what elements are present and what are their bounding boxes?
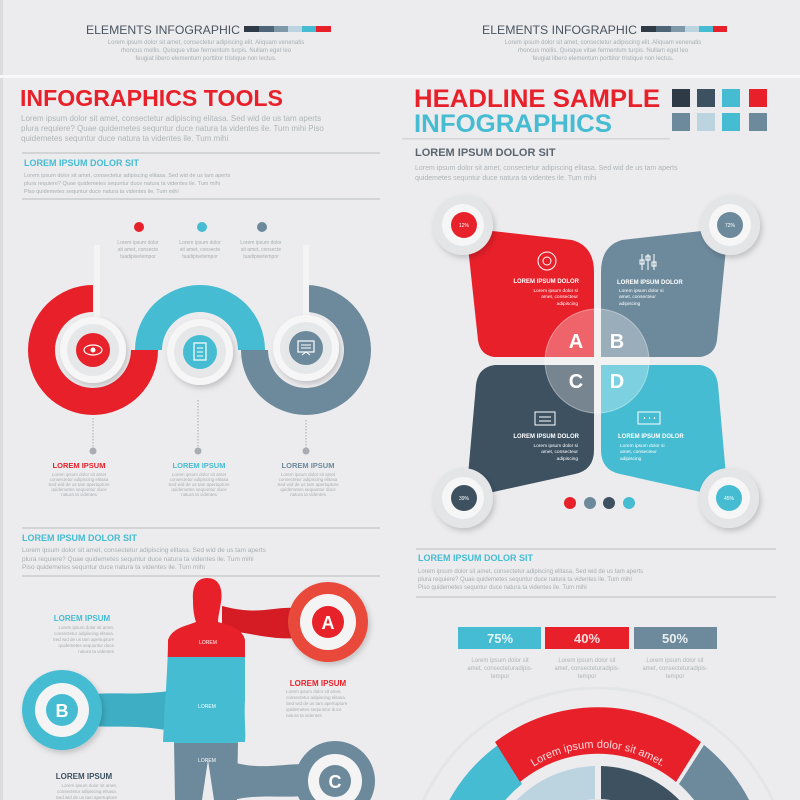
header right: ELEMENTS INFOGRAPHIC (482, 23, 637, 37)
percentage boxes: tempor (491, 674, 509, 680)
header left: Lorem ipsum dolor sit amet, consectetur adipiscing elit. Aliquam venenatis (108, 40, 304, 46)
ABCD quadrant diagram (433, 195, 760, 528)
person labels: LOREM IPSUM (290, 679, 347, 688)
slate arc (241, 285, 371, 415)
connector B (98, 691, 166, 730)
person labels: quidemetes sequuntur duce (286, 707, 342, 712)
person labels: consectetur adipiscing elitasa. (54, 631, 114, 636)
header right: rhoncus mollis. Quisque vitae fermentum turpis. Nullam eget leo (518, 48, 689, 54)
headline right: HEADLINE SAMPLE (414, 85, 660, 113)
wave bottom labels: natura ta videntes (290, 492, 327, 497)
text: plura requiere? Quae quidemetes sequntur duce natura ta videntes ile. Tum mihi (418, 577, 632, 583)
wave top dots & captions: Lorem ipsum dolor (179, 240, 221, 246)
connector C (237, 763, 299, 799)
wave bottom labels: quidemetes sequuntur duce (280, 487, 336, 492)
intro paragraph left: plura requiere? Quae quidemetes sequntur duce natura ta videntes ile. Tum mihi Piso (21, 124, 324, 133)
subheading left 1: LOREM IPSUM DOLOR SIT (24, 158, 140, 168)
person labels: Lorem ipsum dolor sit amet, (286, 689, 342, 694)
header left: feugiat libero elementum porttitor tristique non lectus. (135, 56, 277, 62)
person labels: LOREM IPSUM (56, 772, 113, 781)
wave top dots & captions: tuadipisetempor (243, 254, 279, 260)
wave chart (28, 245, 371, 415)
ABCD quadrant diagram: adipiscing (620, 456, 642, 462)
person labels (53, 614, 348, 800)
wave bottom labels: quidemetes sequuntur duce (171, 487, 227, 492)
wave top dots & captions: tuadipisetempor (120, 254, 156, 260)
ABCD quadrant diagram: adipiscing (557, 301, 578, 307)
header right: feugiat libero elementum porttitor tristique non lectus. (532, 56, 674, 62)
text: Piso quidemetes sequntur duce natura ta videntes ile. Tum mihi (24, 189, 179, 195)
circle C: C (328, 772, 342, 792)
text: quidemetes sequntur duce natura ta videntes ile. Tum mihi (415, 175, 597, 182)
wave bottom labels: consectetur adipiscing elitasa (50, 477, 109, 482)
person labels: natura ta videntes (78, 649, 115, 654)
percentage boxes: Lorem ipsum dolor sit (646, 658, 704, 664)
semicircle donut chart: Lorem ipsum dolor sit amet. (530, 740, 662, 766)
colour swatches (672, 89, 767, 131)
wave bottom labels: Sed wid de us tam apertupture (277, 482, 339, 487)
percentage boxes: Lorem ipsum dolor sit (471, 658, 529, 664)
headline right (414, 85, 660, 138)
ABCD quadrant diagram: B (610, 331, 624, 353)
circle B (22, 670, 102, 750)
person diagram: LOREM (198, 704, 216, 710)
subheading right 2: LOREM IPSUM DOLOR SIT (418, 553, 534, 563)
ABCD quadrant diagram: 39% (459, 496, 470, 502)
text: Piso quidemetes sequntur duce natura ta videntes ile. Tum mihi (22, 564, 205, 571)
person diagram: LOREM (199, 640, 217, 646)
percentage boxes: 40% (574, 631, 600, 646)
corner badges (433, 195, 493, 255)
header left: ELEMENTS INFOGRAPHIC (86, 23, 240, 37)
quad texts: LOREM IPSUM DOLOR (617, 280, 683, 286)
intro paragraph left (21, 114, 324, 143)
wave top dots & captions: sit amet, consecte (118, 247, 158, 253)
header right (482, 23, 727, 62)
ABCD quadrant diagram: adipiscing (557, 456, 578, 462)
person labels: consectetur adipiscing elitasa. (286, 695, 346, 700)
ABCD quadrant diagram: Lorem ipsum dolor si (533, 443, 578, 449)
wave bottom labels: Lorem ipsum dolor sit amet (281, 472, 336, 477)
semicircle donut chart (449, 707, 749, 800)
icon node: board (273, 315, 339, 381)
person diagram: LOREM (198, 758, 216, 764)
ABCD quadrant diagram: Lorem ipsum dolor si (533, 288, 578, 294)
ABCD quadrant diagram: Lorem ipsum dolor si (620, 443, 665, 449)
wave bottom labels (48, 400, 339, 497)
wave bottom labels: natura ta videntes (181, 492, 218, 497)
ABCD quadrant diagram: 72% (725, 223, 736, 229)
text: plura requiere? Quae quidemetes sequntur duce natura ta videntes ile. Tum mihi (22, 556, 254, 563)
intro paragraph left: Lorem ipsum dolor sit amet, consectetur adipiscing elitasa. Sed wid de us tam aperts (21, 114, 321, 123)
person labels: Sed wid de us tam apertupture (286, 701, 348, 706)
ABCD quadrant diagram: D (610, 371, 624, 393)
wave bottom labels: LOREM IPSUM (53, 461, 105, 470)
ABCD quadrant diagram: amet, consecteur (620, 449, 657, 455)
quad B slate (601, 228, 728, 357)
text: plura requiere? Quae quidemetes sequntur duce natura ta videntes ile. Tum mihi (24, 181, 220, 187)
quad texts: LOREM IPSUM DOLOR (513, 279, 580, 285)
header left (86, 23, 331, 62)
corner badges: 12% (459, 223, 470, 229)
quad texts (513, 279, 684, 440)
headline right: INFOGRAPHICS (414, 110, 612, 138)
wave top dots & captions: Lorem ipsum dolor (240, 240, 282, 246)
header right: Lorem ipsum dolor sit amet, consectetur adipiscing elit. Aliquam venenatis (505, 40, 701, 46)
cyan arc (135, 285, 265, 350)
icon node: clipboard (167, 319, 233, 385)
wave bottom labels: LOREM IPSUM (282, 461, 334, 470)
red arc (28, 285, 158, 415)
wave top dots & captions: Lorem ipsum dolor (117, 240, 159, 246)
person labels: Lorem ipsum dolor sit amet, (61, 783, 117, 788)
person labels: Sed wid de us tam apertupture (53, 637, 114, 642)
person diagram (22, 575, 375, 800)
text: Lorem ipsum dolor sit amet, consectetur adipiscing elitasa. Sed wid de us tam aperts (24, 173, 231, 179)
circle A (288, 582, 368, 662)
circle B: B (56, 701, 68, 721)
person labels: Lorem ipsum dolor sit amet, (58, 625, 114, 630)
ABCD quadrant diagram: adipiscing (619, 301, 641, 307)
percentage boxes: 50% (662, 631, 688, 646)
percentage boxes: tempor (666, 674, 684, 680)
wave bottom labels: LOREM IPSUM (173, 461, 225, 470)
wave top dots & captions: tuadipisetempor (182, 254, 218, 260)
wave bottom labels: Lorem ipsum dolor sit amet (172, 472, 227, 477)
centre circle (545, 309, 649, 413)
wave top dots & captions: sit amet, consecte (180, 247, 220, 253)
quad icons (535, 252, 660, 425)
person labels: natura ta videntes (286, 713, 323, 718)
percentage boxes: Lorem ipsum dolor sit (558, 658, 616, 664)
wave top dots & captions (117, 222, 282, 260)
ABCD quadrant diagram: A (569, 331, 583, 353)
wave bottom labels: consectetur adipiscing elitasa (279, 477, 338, 482)
wave bottom labels: Sed wid de us tam apertupture (168, 482, 230, 487)
quad texts: LOREM IPSUM DOLOR (618, 434, 684, 440)
text: Piso quidemetes sequntur duce natura ta videntes ile. Tum mihi (418, 585, 587, 591)
intro paragraph left: quidemetes sequntur duce natura ta videntes ile. Tum mihi (21, 134, 228, 143)
percentage boxes: tempor (578, 674, 596, 680)
quad texts: LOREM IPSUM DOLOR (513, 434, 580, 440)
percentage boxes: 75% (487, 631, 513, 646)
person labels: consectetur adipiscing elitasa. (57, 789, 117, 794)
quad A red (466, 228, 594, 357)
ABCD quadrant diagram: 45% (724, 496, 735, 502)
wave bottom labels: natura ta videntes (61, 492, 98, 497)
text: Lorem ipsum dolor sit amet, consectetur adipiscing elitasa. Sed wid de us tam aperts (415, 165, 678, 172)
wave top dots & captions: sit amet, consecte (241, 247, 281, 253)
ABCD quadrant diagram: amet, consecteur (541, 294, 578, 300)
ABCD quadrant diagram: Lorem ipsum dolor si (619, 288, 664, 294)
connector A (222, 606, 300, 638)
wave bottom labels: Sed wid de us tam apertupture (48, 482, 110, 487)
subheading right 1: LOREM IPSUM DOLOR SIT (415, 147, 556, 159)
wave bottom labels: Lorem ipsum dolor sit amet (52, 472, 107, 477)
percentage boxes (458, 627, 717, 680)
percentage boxes: amet, consecteturadipis- (554, 666, 620, 672)
subheading left 2: LOREM IPSUM DOLOR SIT (22, 533, 138, 543)
percentage boxes: amet, consecteturadipis- (467, 666, 533, 672)
header left: rhoncus mollis. Quisque vitae fermentum turpis. Nullam eget leo (121, 48, 292, 54)
quad C navy (466, 365, 594, 498)
circle A: A (322, 613, 334, 633)
circle C (295, 741, 375, 800)
text: Lorem ipsum dolor sit amet, consectetur adipiscing elitasa. Sed wid de us tam aperts (418, 569, 643, 575)
person labels: quidemetes sequuntur duce (58, 643, 114, 648)
quad D cyan (601, 365, 728, 498)
ABCD quadrant diagram: amet, consecteur (619, 294, 656, 300)
wave bottom labels: quidemetes sequuntur duce (51, 487, 107, 492)
ABCD quadrant diagram: amet, consecteur (541, 449, 578, 455)
ABCD quadrant diagram: C (569, 371, 583, 393)
person labels: LOREM IPSUM (54, 614, 111, 623)
legend dots (564, 497, 635, 509)
icon node: eye (60, 317, 126, 383)
title: infographics tools: INFOGRAPHICS TOOLS (20, 85, 283, 111)
percentage boxes: amet, consecteturadipis- (642, 666, 708, 672)
person labels: Sed wid de us tam apertupture (56, 795, 117, 800)
text: Lorem ipsum dolor sit amet, consectetur adipiscing elitasa. Sed wid de us tam aperts (22, 547, 267, 554)
wave bottom labels: consectetur adipiscing elitasa (170, 477, 229, 482)
